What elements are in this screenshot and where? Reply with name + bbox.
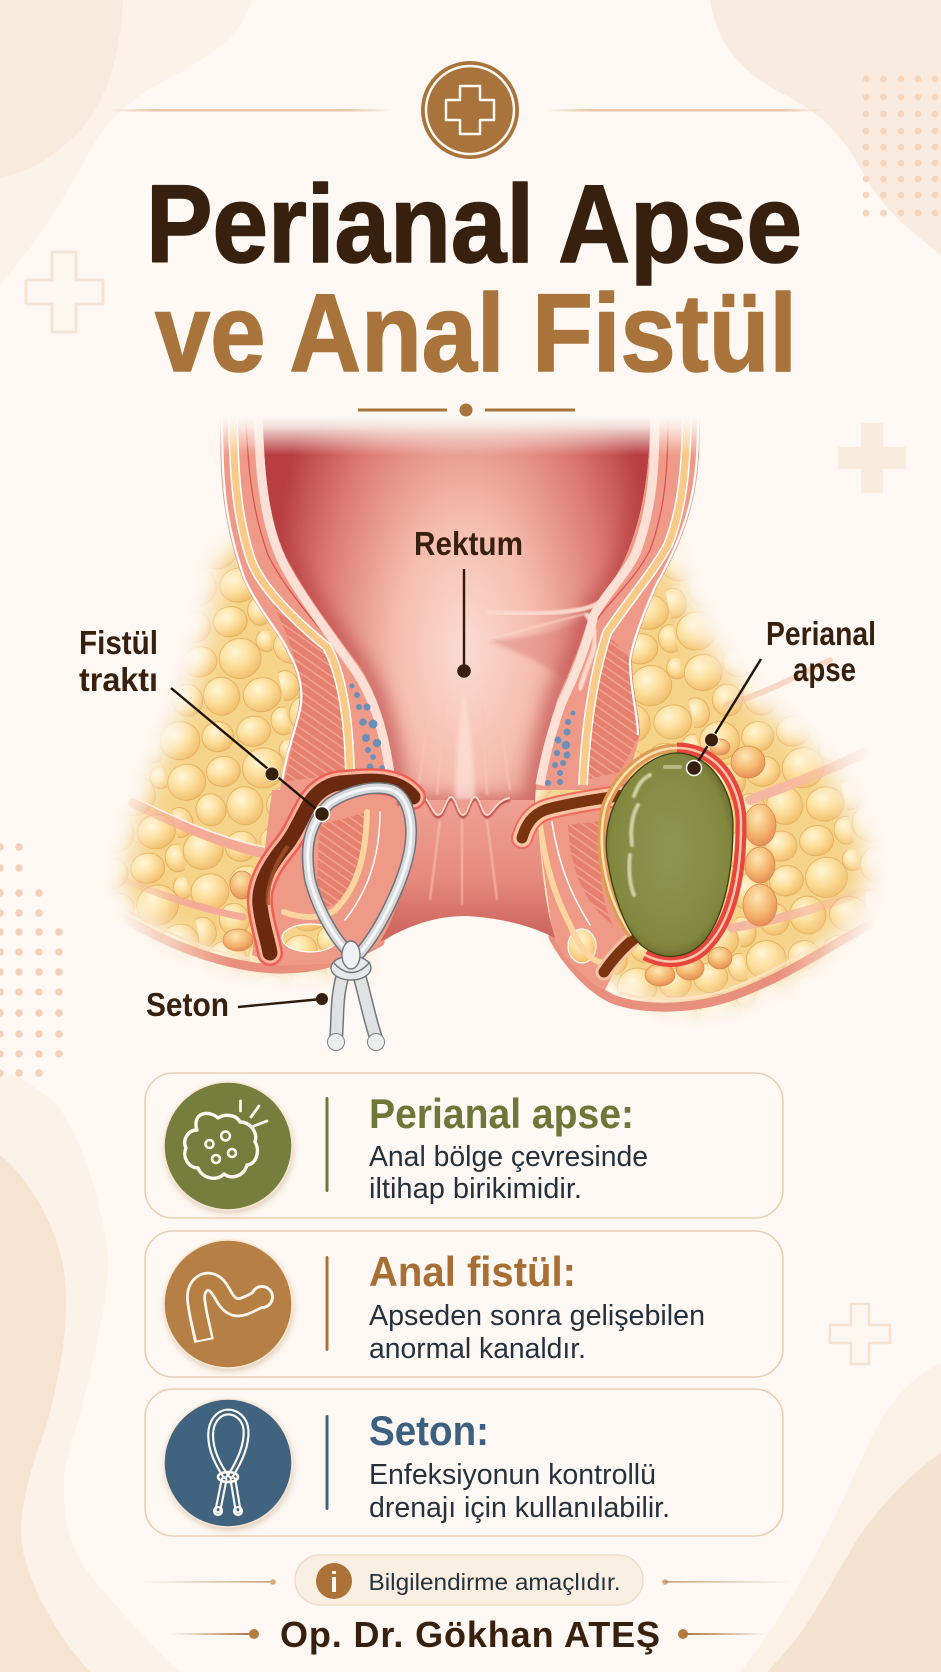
label: fistül trakti: Fistül	[79, 624, 158, 661]
decorative cross: left outline	[26, 252, 103, 332]
heading: Anal fistül:	[369, 1248, 576, 1295]
lower wall mass: right	[535, 795, 635, 990]
decorative cross: lower right outline	[830, 1304, 890, 1364]
leader: seton	[238, 993, 328, 1007]
leader: rektum	[457, 569, 471, 678]
seton loop	[308, 788, 411, 953]
icon: fistula tract	[164, 1240, 292, 1368]
heading: Perianal apse:	[369, 1090, 634, 1137]
icon: info	[316, 1563, 352, 1599]
rectal fold	[476, 601, 602, 688]
divider	[326, 1256, 328, 1351]
muscle wedge: right lower	[568, 820, 613, 925]
divider	[326, 1415, 328, 1510]
decorative cross: right filled	[839, 424, 905, 492]
panel: seton	[145, 1389, 783, 1536]
label: perianal apse	[766, 615, 876, 688]
heading: Seton:	[369, 1407, 489, 1454]
label: perianal apse: Perianal	[766, 615, 876, 652]
right wall body	[533, 418, 700, 790]
leader: perianal apse	[686, 659, 761, 776]
seton tails	[328, 978, 384, 1050]
description	[369, 1459, 670, 1524]
icon: seton loop	[164, 1399, 292, 1527]
fat pocket lower right	[568, 929, 596, 963]
lower wall mass: left	[252, 790, 420, 966]
footer rules: disclaimer	[141, 1579, 791, 1585]
decorative blob: top right	[710, 0, 941, 255]
haemorrhoidal vessels: right	[545, 710, 576, 786]
divider	[326, 1097, 328, 1192]
description: iltihap birikimidir.	[369, 1173, 582, 1205]
haemorrhoidal vessels: left	[350, 684, 385, 771]
wall layers: left	[222, 418, 392, 790]
label: seton: Seton	[146, 986, 229, 1023]
fistula tract: left	[260, 781, 413, 953]
icon: abscess	[164, 1082, 292, 1210]
lower wall stripes	[284, 812, 600, 962]
title	[146, 163, 802, 395]
fat pocket lower left	[282, 924, 338, 952]
left wall body	[220, 418, 400, 790]
title: Perianal Apse	[146, 163, 802, 286]
dot grid: left	[0, 843, 63, 1077]
description: Anal bölge çevresinde	[369, 1141, 648, 1173]
label: perianal apse: apse	[793, 651, 856, 688]
top fade	[205, 417, 715, 455]
inflamed fat around abscess	[645, 739, 777, 986]
abscess capsule	[602, 748, 741, 962]
connective bands in fat: right	[726, 660, 880, 928]
title: ve Anal Fistül	[155, 272, 797, 395]
panel: perianal apse	[145, 1073, 783, 1218]
fat tissue	[109, 536, 881, 1022]
connective bands in fat: left	[117, 797, 266, 917]
icon: info: i	[330, 1567, 338, 1599]
canal longitudinal folds	[418, 700, 510, 905]
label: rektum: Rektum	[414, 525, 523, 562]
description: Enfeksiyonun kontrollü	[369, 1459, 656, 1491]
label: fistül trakti: traktı	[79, 661, 158, 698]
muscle wedge: left	[270, 595, 350, 782]
author rules	[171, 1629, 767, 1639]
abscess	[606, 753, 733, 956]
icon: medical cross medallion	[421, 61, 519, 159]
inflamed fat lower left	[223, 871, 254, 951]
fistula tract: right	[522, 795, 638, 972]
label: fistül trakti	[79, 624, 158, 698]
rectum lumen	[263, 418, 650, 806]
dentate line	[418, 795, 510, 817]
disclaimer text: Bilgilendirme amaçlıdır.	[368, 1569, 620, 1595]
author name: Op. Dr. Gökhan ATEŞ	[280, 1614, 660, 1655]
skin band: right	[553, 920, 873, 1007]
title divider	[358, 404, 575, 416]
description: drenajı için kullanılabilir.	[369, 1492, 670, 1524]
muscle wedge: right	[583, 633, 640, 780]
leader: fistül trakti	[171, 688, 330, 822]
dot grid: top right	[863, 76, 938, 216]
description	[369, 1141, 648, 1205]
description: Apseden sonra gelişebilen	[369, 1300, 705, 1332]
description: anormal kanaldır.	[369, 1333, 586, 1365]
panel: anal fistül	[145, 1231, 783, 1377]
header rules	[108, 109, 824, 112]
decorative blob: top left	[0, 0, 252, 285]
decorative blob: bottom left	[0, 1070, 180, 1672]
anal canal	[380, 800, 555, 942]
description	[369, 1300, 705, 1365]
disclaimer pill	[295, 1555, 643, 1605]
seton knot	[331, 941, 371, 980]
wall layers: right	[540, 418, 698, 785]
anatomical illustration	[79, 417, 900, 1050]
decorative blob: bottom right	[740, 1363, 941, 1672]
muscle wedge: left lower	[314, 812, 368, 907]
skin band: left	[122, 912, 380, 969]
